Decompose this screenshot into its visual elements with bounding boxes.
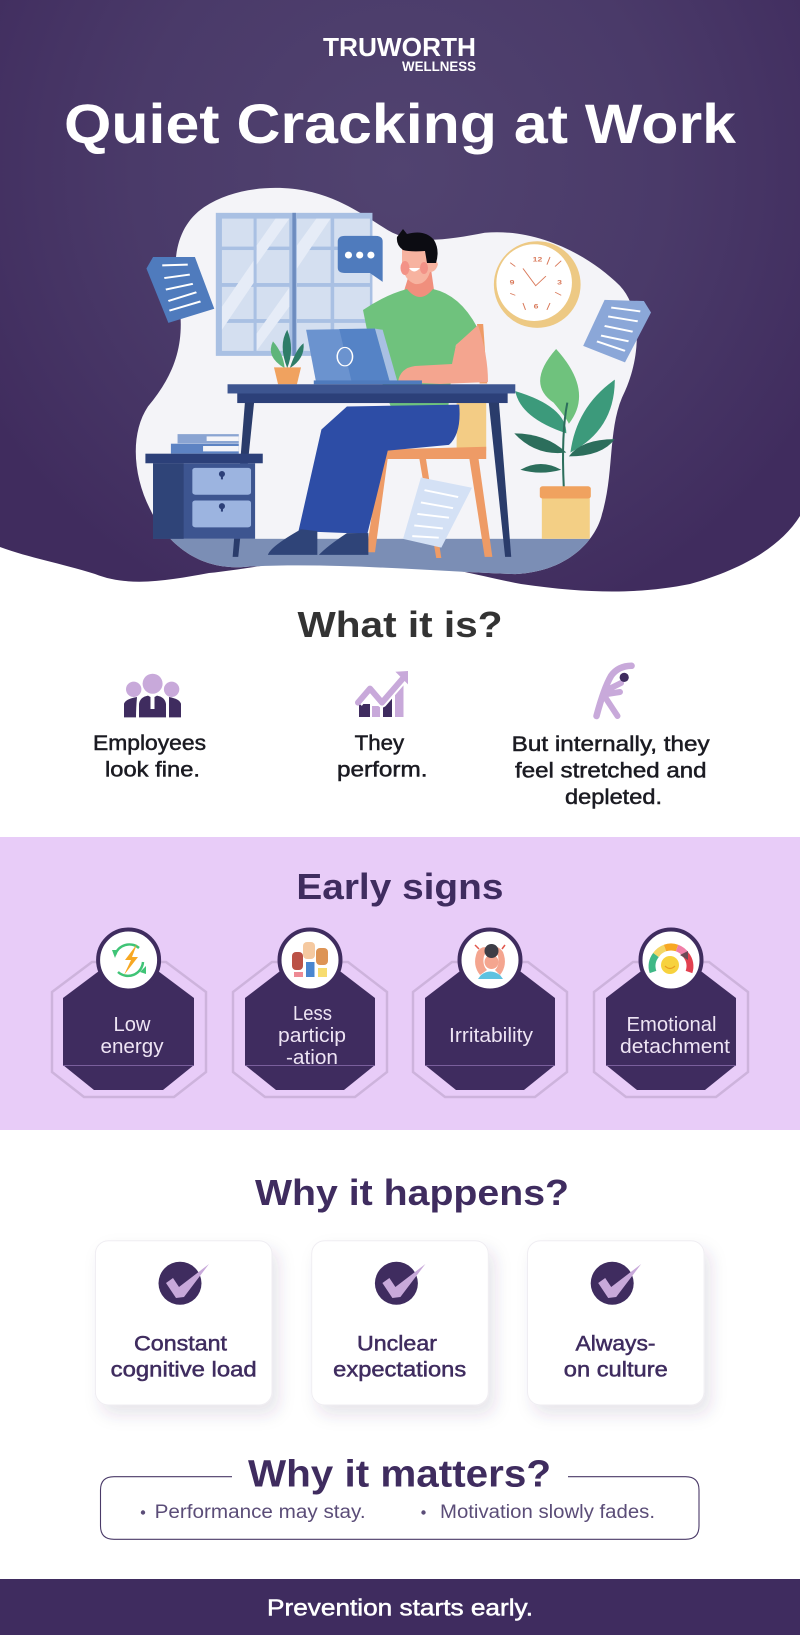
person: head, shirt and arm [363, 229, 488, 410]
icon: rising chart [358, 671, 408, 717]
clock [494, 241, 581, 328]
text [333, 1333, 466, 1382]
paper: floor [403, 477, 472, 548]
text: perform. [337, 758, 428, 782]
card: unclear expectations [312, 1241, 488, 1405]
text [93, 732, 206, 782]
speech bubble [338, 236, 383, 282]
text [111, 1333, 257, 1382]
laptop [306, 329, 422, 384]
clock: 6 [534, 302, 538, 310]
bullet: motivation: Motivation slowly fades. [440, 1502, 655, 1523]
label: particip [278, 1025, 346, 1047]
text: Unclear [357, 1333, 437, 1356]
label: Less [293, 1003, 332, 1025]
bullet: performance: Performance may stay. [155, 1502, 366, 1523]
label: detachment [620, 1036, 730, 1058]
label [100, 1014, 164, 1058]
item: they perform [337, 671, 428, 782]
paper: right [583, 300, 651, 362]
heading: Early signs: Early signs [296, 866, 503, 907]
illustration backdrop [128, 188, 638, 581]
icon: raised hands [292, 942, 328, 977]
label [620, 1014, 730, 1058]
card: constant cognitive load [95, 1241, 272, 1405]
icon: stretching figure [596, 666, 632, 716]
icon: check [375, 1262, 425, 1305]
chair [366, 324, 492, 558]
paper: left [146, 257, 214, 323]
sign: irritability [413, 930, 567, 1097]
panel: early signs [0, 837, 800, 1130]
sign: emotional detachment [594, 930, 748, 1097]
sign: less participation [233, 930, 387, 1097]
small potted plant [271, 330, 304, 384]
logo: WELLNESS [402, 58, 476, 74]
desk [228, 384, 515, 557]
text: depleted. [565, 786, 662, 809]
panel: why it matters [100, 1454, 699, 1539]
card: always-on culture [528, 1241, 704, 1405]
heading: What it is?: What it is? [298, 604, 502, 645]
icon: mood meter [652, 947, 690, 974]
label [278, 1003, 346, 1069]
clock: 3 [557, 279, 562, 286]
text: look fine. [105, 758, 200, 782]
text [512, 733, 710, 809]
icon: check [591, 1262, 641, 1305]
text: on culture [564, 1359, 668, 1382]
large potted plant [514, 349, 615, 539]
clock: 9 [510, 279, 515, 286]
text: Always- [576, 1333, 656, 1356]
icon: check [158, 1262, 209, 1305]
logo: TRUWORTH [323, 32, 476, 62]
title: Quiet Cracking at Work [64, 92, 737, 155]
label: energy [100, 1036, 164, 1058]
text: Employees [93, 732, 206, 755]
panel background [0, 837, 800, 1130]
item: internally stretched [512, 666, 710, 809]
heading: Why it matters?: Why it matters? [248, 1454, 551, 1496]
item: employees look fine [93, 674, 206, 782]
footer banner: Prevention starts early. [267, 1595, 533, 1621]
hero background [0, 0, 800, 592]
clock: 12 [533, 256, 542, 263]
window [216, 213, 372, 356]
footer banner [0, 1579, 800, 1635]
filing cabinet with books [145, 434, 263, 539]
illustration: person working at a desk [128, 188, 651, 581]
icon: frustrated person [475, 944, 505, 979]
label: Irritability [449, 1025, 533, 1047]
icon: three people [124, 674, 181, 717]
heading: Why it happens?: Why it happens? [255, 1172, 569, 1213]
outlined box [100, 1477, 699, 1539]
text [337, 732, 428, 782]
label: Emotional [626, 1014, 716, 1036]
text: They [355, 732, 405, 755]
icon: energy bolt [112, 944, 146, 976]
text [564, 1333, 668, 1382]
text: Constant [134, 1333, 227, 1356]
label: Low [114, 1014, 151, 1036]
text: feel stretched and [515, 760, 707, 783]
sign: low energy [52, 930, 206, 1097]
text: expectations [333, 1359, 466, 1382]
label: -ation [286, 1047, 338, 1069]
text: But internally, they [512, 733, 710, 756]
person: legs and shoes [268, 405, 460, 555]
text: cognitive load [111, 1359, 257, 1382]
